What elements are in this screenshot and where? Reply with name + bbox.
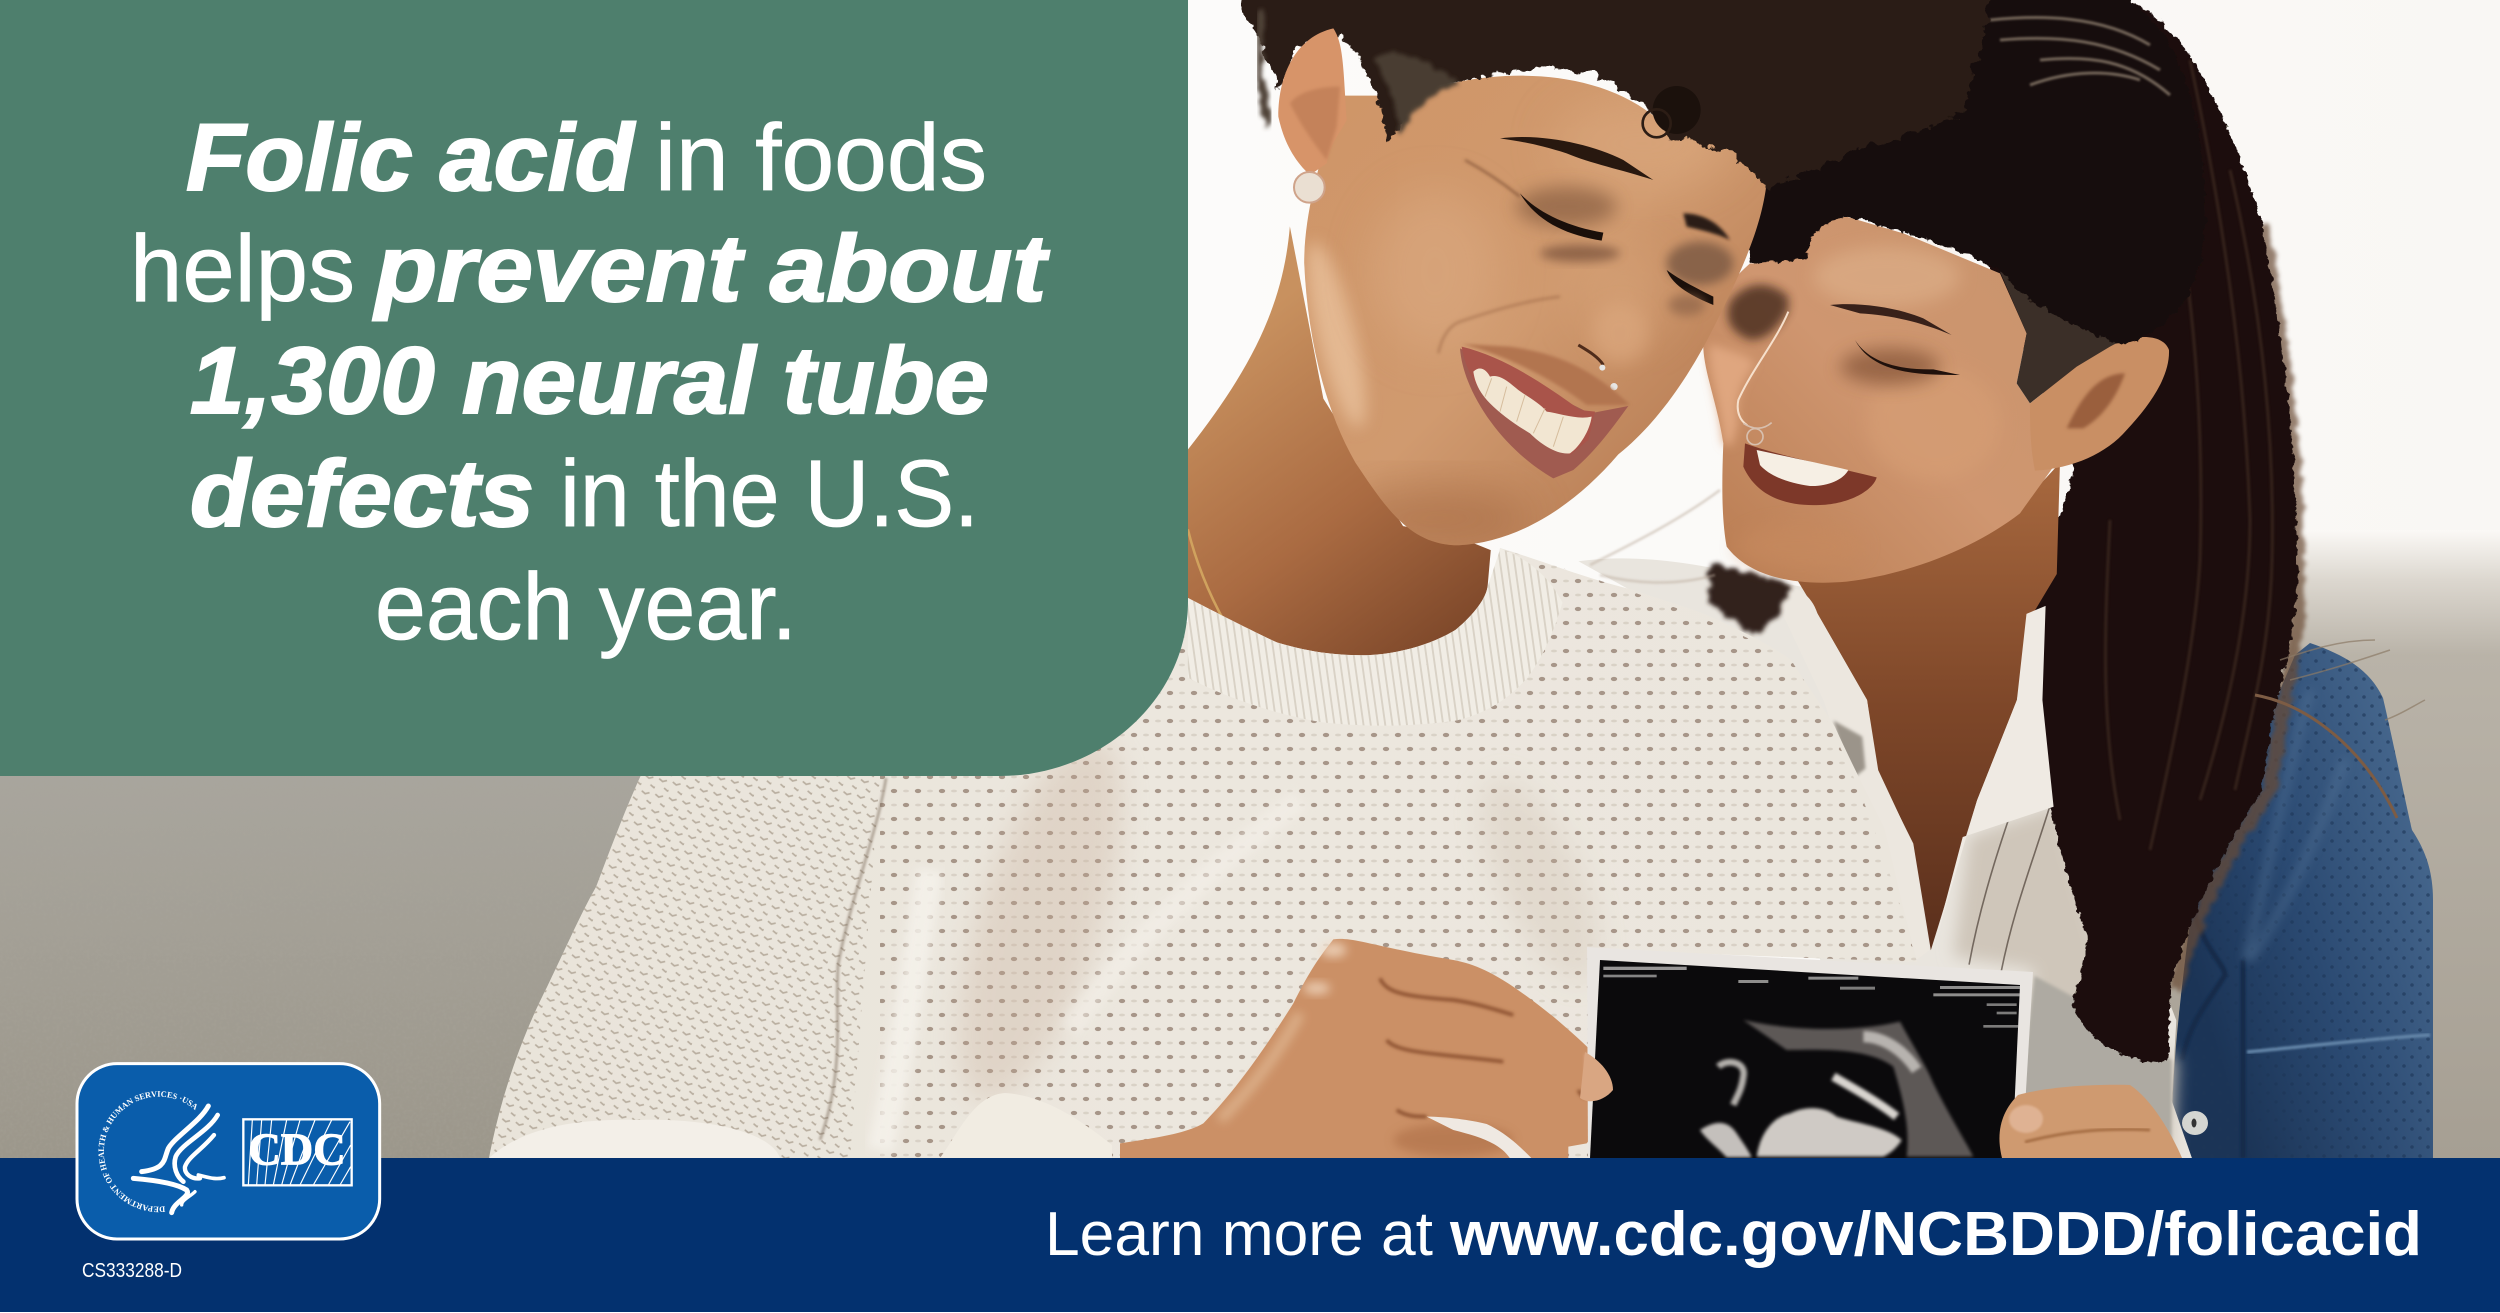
- second woman: blue cardigan: [2172, 643, 2433, 1158]
- second woman: nose ring: [1743, 423, 1772, 445]
- first woman: far eyebrow: [1683, 213, 1730, 240]
- first woman: earring: [1294, 172, 1325, 203]
- sleeve cuff: [489, 1120, 780, 1158]
- first woman: knit sweater: [489, 548, 1917, 1158]
- HHS eagle: [133, 1106, 224, 1213]
- line 2: helps: [130, 216, 355, 322]
- line 3: 1,300 neural tube: [190, 328, 989, 434]
- first woman: hand holding the picture: [1120, 939, 1613, 1158]
- left collar flap: [1806, 596, 1914, 848]
- call to action: [1045, 1200, 2422, 1269]
- line 5: each year.: [375, 554, 797, 660]
- headline text: [130, 105, 1050, 660]
- grey sofa, right side: [2169, 542, 2500, 1158]
- first woman: face base: [1304, 76, 1767, 545]
- second woman: teeth: [1757, 450, 1848, 486]
- grey sofa, left side: [0, 776, 640, 1158]
- first woman: eye socket shading: [1517, 187, 1617, 227]
- first woman: neck and chest: [1188, 76, 1767, 726]
- line 4: in the U.S.: [560, 441, 979, 547]
- cardigan shoulder folds: [2246, 690, 2345, 960]
- second woman: eye socket shading: [1840, 348, 1940, 385]
- first woman: gums: [1462, 347, 1595, 455]
- first woman: nose light: [1592, 303, 1648, 363]
- line 4: defects: [190, 441, 534, 547]
- second woman: chin light: [1737, 523, 1863, 570]
- second woman: long back hair: [1960, 0, 2297, 1062]
- HHS circular text: DEPARTMENT OF HEALTH & HUMAN SERVICES ·USA: [98, 1091, 197, 1212]
- line 2: [130, 216, 1050, 322]
- second woman: hand on the picture: [1999, 1085, 2182, 1158]
- cardigan cuff line: [2247, 1035, 2430, 1052]
- first woman: under-eye shadow: [1540, 245, 1620, 262]
- first woman: cheek crease: [1438, 297, 1560, 353]
- second woman: grey flyaways at crown: [1990, 18, 2170, 95]
- second woman: far cheek: [1709, 343, 1755, 447]
- first woman: far eye socket: [1667, 242, 1733, 285]
- line 1: in foods: [655, 105, 987, 211]
- HHS seal: [98, 1091, 226, 1216]
- thumbnail: [2009, 1105, 2043, 1133]
- second woman: far eye socket: [1728, 285, 1788, 340]
- second woman: cheek light: [1867, 367, 2000, 480]
- sweater collar: [1188, 548, 1563, 726]
- second woman: fuzzy hair rim: [2175, 225, 2298, 990]
- shirt shadow behind hair: [1953, 805, 2176, 1159]
- first woman: far eye lashes: [1667, 270, 1713, 305]
- collar shadow fold: [1834, 721, 1865, 781]
- first woman: lower lip: [1460, 348, 1628, 478]
- ultrasound printed data: [1603, 967, 2020, 1028]
- finger creases: [1380, 978, 1587, 1117]
- ultrasound lower left figure: [1700, 1123, 1752, 1157]
- first woman: teeth separators: [1485, 378, 1563, 447]
- bright wall behind the couple: [1860, 0, 2500, 530]
- first woman: nose studs: [1599, 365, 1618, 390]
- second woman: hair beside chin: [1708, 563, 1792, 635]
- first woman: inner ear: [1290, 87, 1340, 160]
- sweater body stitches: [641, 548, 1917, 1158]
- ultrasound ear outline: [1718, 1062, 1744, 1105]
- second woman: long flyaway strand: [2255, 695, 2397, 818]
- second woman: ear: [2030, 337, 2169, 471]
- first woman: closed eye lashes: [1520, 193, 1603, 241]
- CDC sun rays: [248, 1120, 351, 1185]
- sweater warm shadow band: [924, 721, 1156, 1119]
- line 4: [190, 441, 979, 547]
- second woman: shirt collar: [1806, 596, 2054, 910]
- hand knuckle light 2: [1303, 982, 1330, 994]
- second woman: neck: [1794, 462, 2060, 950]
- HHS and CDC logo badge: [76, 1062, 382, 1240]
- sweater seam: [820, 778, 886, 1140]
- sweater light fold 2: [1070, 800, 1300, 1030]
- first woman: eyebrow: [1500, 137, 1653, 180]
- hand lower shadow: [1393, 1123, 1513, 1157]
- first woman: forehead curl: [1643, 86, 1701, 137]
- line 1: [186, 105, 987, 211]
- navy footer band: [0, 1158, 2500, 1312]
- shirt lower grey area: [2026, 976, 2173, 1138]
- document code: CS333288-D: [82, 1260, 182, 1282]
- hand back light: [1220, 1013, 1300, 1120]
- sweater light fold: [880, 870, 930, 1150]
- ultrasound bright band: [1833, 1077, 1897, 1117]
- second woman: inner ear: [2067, 373, 2125, 428]
- CDC letters: CDC: [248, 1125, 346, 1175]
- second woman: undercut hair: [2000, 272, 2117, 403]
- fingertip nail: [1585, 1053, 1613, 1092]
- line 1: Folic acid: [186, 105, 636, 211]
- second woman: closed eye lashes: [1855, 340, 1960, 375]
- second woman: bangs and crown hair: [1744, 0, 2206, 345]
- gold necklace: [1188, 529, 1224, 622]
- thin hair strands over the shirt: [1968, 808, 2050, 970]
- second woman: face: [1703, 217, 2169, 583]
- first woman: teeth: [1473, 369, 1592, 453]
- finger crease: [2025, 1129, 2150, 1142]
- white paper edge under the finger: [1427, 1117, 1532, 1158]
- second woman: hair strands: [2106, 60, 2272, 850]
- ultrasound scan mass: [1743, 1020, 1973, 1157]
- second woman: nose profile highlight: [1738, 312, 1788, 425]
- second woman: wisps behind chin: [1590, 490, 1720, 582]
- second woman: flyaways above the shoulder: [2280, 640, 2425, 720]
- second woman: white shirt: [1578, 558, 2192, 1159]
- call to action: www.cdc.gov/NCBDDD/folicacid: [1449, 1200, 2422, 1269]
- second woman: lower lip: [1743, 443, 1877, 505]
- sweater sleeve stitches: [489, 775, 880, 1158]
- first woman: upper lip: [1462, 344, 1630, 405]
- second woman: forehead light: [1813, 247, 1960, 307]
- CDC mark: [243, 1119, 352, 1185]
- hand knuckle light: [1320, 943, 1347, 957]
- first woman: fingertips over the picture: [1580, 1052, 1613, 1101]
- second sleeve cuff: [940, 1093, 1112, 1158]
- line 2: prevent about: [372, 216, 1050, 322]
- ultrasound picture: [1587, 947, 2033, 1158]
- green message panel: [0, 0, 1188, 776]
- call to action: Learn more at: [1045, 1200, 1433, 1269]
- cardigan placket and cuff seams: [2182, 915, 2243, 1158]
- sweater right warm patch: [1457, 763, 1623, 997]
- first woman: face shading: [1294, 99, 1730, 550]
- first woman: hair: [1225, 0, 2000, 185]
- ultrasound fetal hand: [1757, 1108, 1902, 1157]
- first woman: ear: [1278, 28, 1347, 175]
- first woman: nostril: [1578, 345, 1603, 365]
- first woman: sideburn texture: [1375, 53, 1460, 135]
- first woman: eyelid crease: [1465, 160, 1520, 197]
- ultrasound upper bright spot: [1863, 1037, 1917, 1070]
- cardigan button: [2182, 1111, 2208, 1135]
- first woman: far eye lid: [1668, 294, 1705, 316]
- second woman: eyebrow: [1830, 304, 1952, 335]
- first woman: hair left fuzz: [1258, 10, 1270, 125]
- first woman: face details: [1278, 28, 1733, 478]
